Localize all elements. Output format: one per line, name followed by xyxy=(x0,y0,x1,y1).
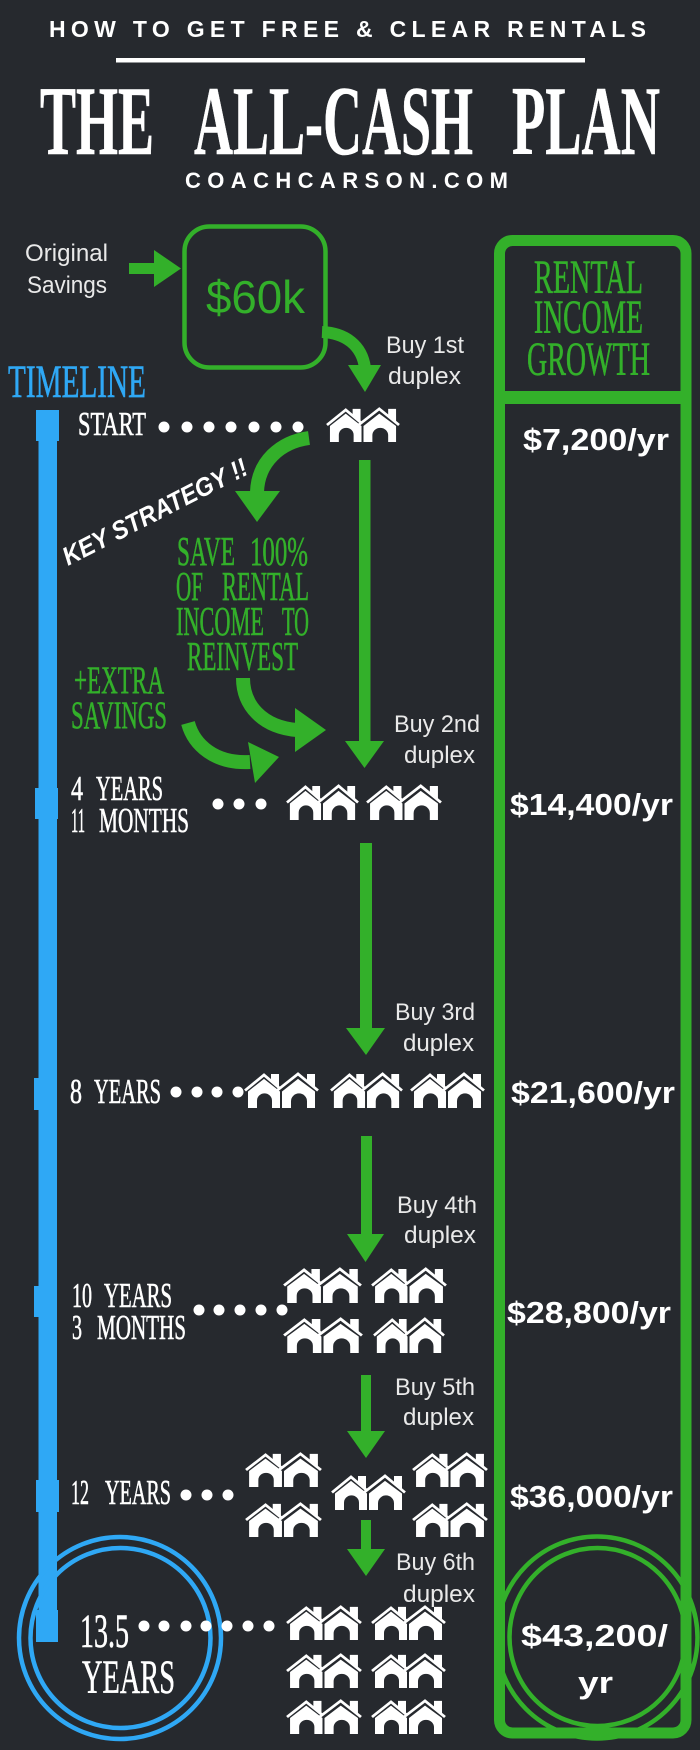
arrow: start to second duplex xyxy=(345,460,384,768)
label: buy 5th duplex: duplex xyxy=(403,1404,474,1431)
save 100 percent text: RENTAL xyxy=(222,563,309,609)
arrow: to fourth duplex xyxy=(347,1136,384,1262)
final value double circle xyxy=(496,1536,698,1738)
value: 7,200: $7,200/yr xyxy=(523,422,669,457)
label: buy 6th duplex: duplex xyxy=(403,1581,475,1608)
label: 10 years 3 months: MONTHS xyxy=(97,1308,186,1347)
label: 4 years 11 months: 11 xyxy=(71,801,85,840)
label: buy 4th duplex: Buy 4th xyxy=(397,1192,477,1219)
save 100 percent text: REINVEST xyxy=(187,633,298,679)
arrow: to third duplex xyxy=(346,843,385,1055)
title: ALL-CASH xyxy=(194,67,473,176)
label: buy 3rd duplex: duplex xyxy=(403,1030,474,1057)
label: buy 4th duplex xyxy=(397,1192,477,1249)
label: buy 1st duplex: duplex xyxy=(388,363,461,390)
original savings label: Savings xyxy=(27,272,107,299)
start label: START xyxy=(78,406,146,443)
icon: first duplex xyxy=(327,409,399,442)
value: 43,200 xyxy=(521,1618,668,1700)
label: 4 years 11 months: 4 xyxy=(71,769,83,808)
key strategy note: KEY STRATEGY !! xyxy=(57,452,253,571)
extra savings text: SAVINGS xyxy=(71,694,167,737)
savings box: $60k xyxy=(206,271,306,323)
panel divider xyxy=(505,391,681,404)
label: 10 years 3 months: 3 xyxy=(72,1308,82,1347)
arrow: reinvest to second duplex xyxy=(243,678,326,752)
label: 8 years xyxy=(70,1072,161,1111)
label: buy 1st duplex xyxy=(386,332,464,390)
icons: two duplexes xyxy=(287,786,441,820)
arrow: to sixth duplex xyxy=(347,1520,385,1576)
value: 28,800: $28,800/yr xyxy=(507,1295,671,1330)
save 100 percent text: TO xyxy=(282,598,309,644)
save 100 percent text: SAVE xyxy=(177,528,235,574)
label: 4 years 11 months xyxy=(71,769,189,840)
value: 43,200: $43,200/ xyxy=(521,1618,668,1653)
dots at 12 years xyxy=(180,1490,234,1500)
icons: five duplexes xyxy=(246,1454,487,1537)
save 100 percent text xyxy=(176,528,309,679)
timeline heading: TIMELINE xyxy=(8,356,146,408)
header subtitle: HOW TO GET FREE & CLEAR RENTALS xyxy=(49,16,646,42)
original savings label xyxy=(25,240,108,299)
value: 21,600: $21,600/yr xyxy=(511,1075,675,1110)
label: 8 years: YEARS xyxy=(94,1072,161,1111)
dots at 13.5 years xyxy=(138,1620,274,1632)
title: THE xyxy=(40,67,154,176)
label: buy 1st duplex: Buy 1st xyxy=(386,332,464,359)
label: 10 years 3 months: 10 xyxy=(72,1276,92,1315)
arrow: savings into box xyxy=(129,250,181,287)
save 100 percent text: INCOME xyxy=(176,598,264,644)
header rule xyxy=(116,58,585,62)
website: COACHCARSON.COM xyxy=(185,168,508,193)
label: buy 3rd duplex: Buy 3rd xyxy=(395,999,475,1026)
label: 12 years xyxy=(71,1473,171,1512)
arrow: to fifth duplex xyxy=(347,1375,385,1458)
label: buy 3rd duplex xyxy=(395,999,475,1057)
extra savings text: +EXTRA xyxy=(74,659,164,702)
timeline bar xyxy=(34,410,59,1642)
label: 12 years: YEARS xyxy=(105,1473,171,1512)
label: buy 2nd duplex: Buy 2nd xyxy=(394,711,480,738)
label: 12 years: 12 xyxy=(71,1473,89,1512)
panel heading xyxy=(527,251,650,386)
label: buy 4th duplex: duplex xyxy=(404,1222,476,1249)
start dots xyxy=(158,422,304,432)
label: 13.5 years xyxy=(80,1605,175,1704)
icons: three duplexes xyxy=(245,1074,484,1108)
save 100 percent text: 100% xyxy=(250,528,308,574)
label: buy 5th duplex: Buy 5th xyxy=(395,1374,475,1401)
value: 36,000: $36,000/yr xyxy=(510,1479,673,1514)
label: buy 6th duplex xyxy=(396,1549,475,1608)
label: 13.5 years: YEARS xyxy=(82,1651,175,1704)
dots at 8 years xyxy=(170,1086,244,1098)
label: buy 2nd duplex: duplex xyxy=(404,742,475,769)
icons: six duplexes xyxy=(287,1607,445,1734)
end-of-timeline double circle xyxy=(19,1537,221,1739)
label: 13.5 years: 13.5 xyxy=(80,1605,129,1658)
panel: rental income growth xyxy=(496,240,698,1738)
icons: four duplexes xyxy=(284,1269,446,1353)
savings box xyxy=(184,226,326,368)
dots at 10 years xyxy=(194,1304,288,1316)
panel frame xyxy=(500,240,686,1733)
label: 10 years 3 months: YEARS xyxy=(104,1276,172,1315)
label: buy 2nd duplex xyxy=(394,711,480,769)
arrow: extra savings to second duplex xyxy=(188,723,279,783)
dots at 4 years xyxy=(212,798,266,810)
original savings label: Original xyxy=(25,240,108,267)
value: 14,400: $14,400/yr xyxy=(510,787,673,822)
extra savings text xyxy=(71,659,167,737)
save 100 percent text: OF xyxy=(176,563,203,609)
value: 43,200: yr xyxy=(578,1665,613,1700)
label: 8 years: 8 xyxy=(70,1072,82,1111)
arrow: buy first duplex xyxy=(322,332,381,392)
label: 4 years 11 months: MONTHS xyxy=(99,801,189,840)
label: buy 6th duplex: Buy 6th xyxy=(396,1549,475,1576)
label: 4 years 11 months: YEARS xyxy=(96,769,163,808)
label: 10 years 3 months xyxy=(72,1276,186,1347)
arrow: key strategy curve xyxy=(235,438,309,522)
label: buy 5th duplex xyxy=(395,1374,475,1431)
